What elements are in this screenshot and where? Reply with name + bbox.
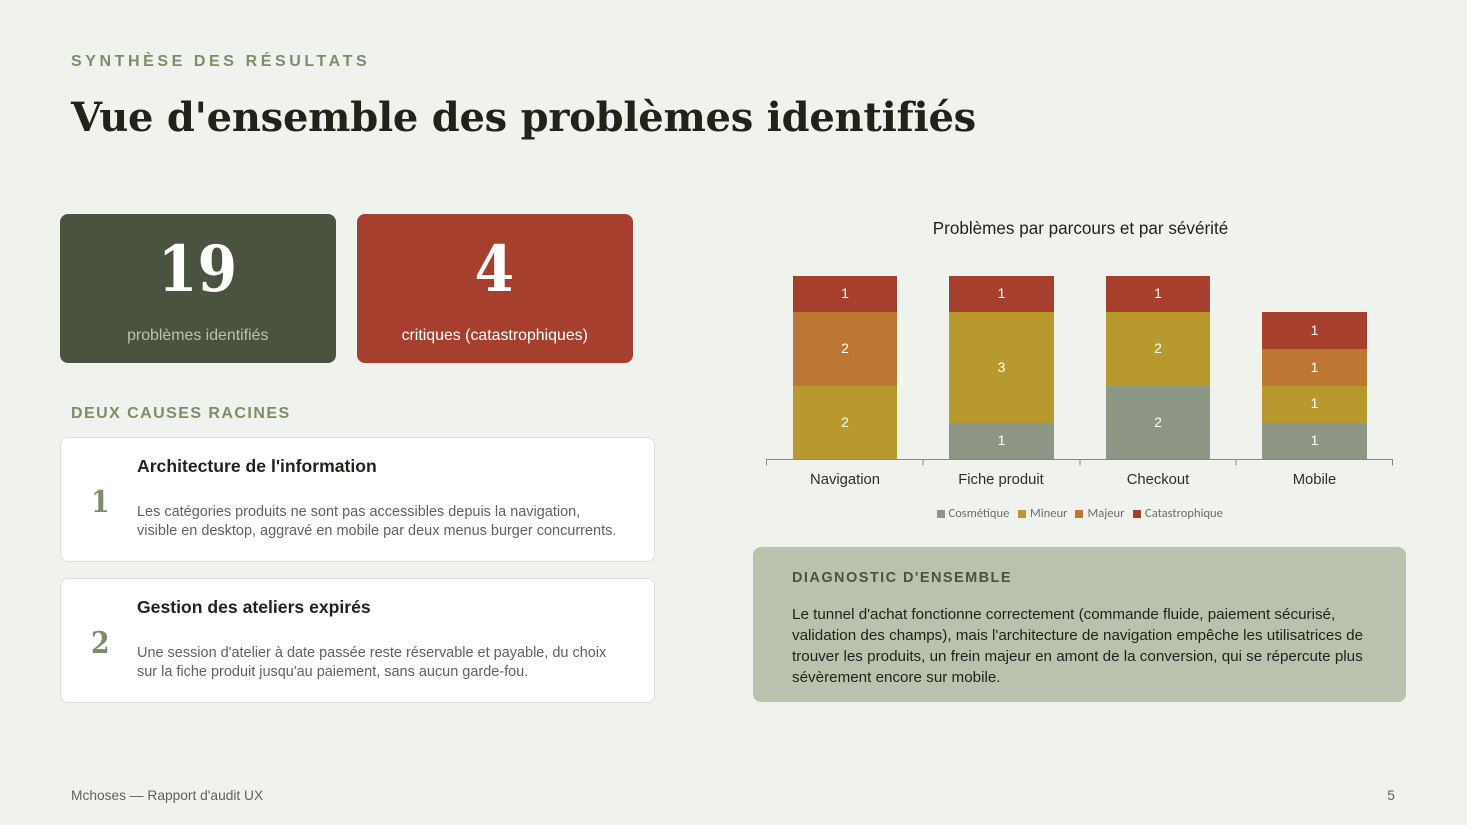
card: root cause 1 <box>60 437 655 562</box>
category labels <box>810 472 1336 488</box>
diagnosis text: trouver les produits, un frein majeur en amont de la conversion, qui se répercute plus <box>792 648 1363 665</box>
KPI: critical problems: critiques (catastrophiques) <box>402 327 588 344</box>
bars: Mobile: 1 <box>1311 432 1319 448</box>
bars: Checkout: 2 <box>1154 340 1162 356</box>
title: Vue d'ensemble des problèmes identifiés <box>71 94 976 141</box>
stacked bar chart <box>766 219 1393 521</box>
chart title: Problèmes par parcours et par sévérité <box>933 219 1228 238</box>
legend: Catastrophique <box>1145 506 1223 521</box>
legend: Mineur <box>1030 506 1068 521</box>
category labels: Checkout <box>1127 472 1189 488</box>
legend: Cosmétique <box>948 506 1009 521</box>
bars: Fiche produit: 1 <box>998 432 1006 448</box>
panel: overall diagnosis <box>753 547 1406 702</box>
card: root cause 1: Architecture de l'information <box>137 456 377 476</box>
bars: Mobile: 1 <box>1311 322 1319 338</box>
KPI: total problems <box>60 214 336 363</box>
bars: Fiche produit: 1 <box>998 285 1006 301</box>
diagnosis heading: DIAGNOSTIC D'ENSEMBLE <box>792 570 1012 586</box>
bars: Fiche produit <box>949 276 1054 460</box>
bars: Mobile: 1 <box>1311 359 1319 375</box>
card: root cause 2: sur la fiche produit jusqu'au paiement, sans aucun garde-fou. <box>137 664 528 680</box>
KPI: critical problems <box>357 214 632 363</box>
page number: 5 <box>1387 788 1395 803</box>
bars: Navigation: 2 <box>841 340 849 356</box>
KPI: total problems: 19 <box>158 232 237 306</box>
bars: Navigation <box>793 276 897 460</box>
bars: Fiche produit: 3 <box>998 359 1006 375</box>
legend <box>937 506 1223 521</box>
KPI: total problems: problèmes identifiés <box>127 327 268 344</box>
diagnosis text: sévèrement encore sur mobile. <box>792 669 1001 686</box>
card: root cause 2 <box>60 578 655 703</box>
diagnosis text: validation des champs), mais l'architecture de navigation empêche les utilisatrices de <box>792 627 1363 644</box>
bars: Checkout: 2 <box>1154 414 1162 430</box>
bars: Mobile: 1 <box>1311 395 1319 411</box>
legend: Majeur <box>1088 506 1125 521</box>
eyebrow heading: SYNTHÈSE DES RÉSULTATS <box>71 53 370 70</box>
bars: Navigation: 1 <box>841 285 849 301</box>
bars: Mobile <box>1262 312 1367 460</box>
category labels: Navigation <box>810 472 880 488</box>
diagnosis text: Le tunnel d'achat fonctionne correctement (commande fluide, paiement sécurisé, <box>792 606 1335 623</box>
category labels: Mobile <box>1293 472 1336 488</box>
KPI: critical problems: 4 <box>475 232 515 306</box>
bars: Checkout <box>1106 276 1210 460</box>
category labels: Fiche produit <box>958 472 1044 488</box>
card: root cause 2: Une session d'atelier à date passée reste réservable et payable, du choix <box>137 645 606 661</box>
card: root cause 1: 1 <box>91 485 110 520</box>
card: root cause 2: Gestion des ateliers expirés <box>137 597 371 617</box>
section heading: root causes: DEUX CAUSES RACINES <box>71 405 291 422</box>
footer source: Mchoses — Rapport d'audit UX <box>71 788 263 803</box>
bars: Checkout: 1 <box>1154 285 1162 301</box>
bars: Navigation: 2 <box>841 414 849 430</box>
diagnosis text <box>792 606 1363 686</box>
card: root cause 2: 2 <box>91 626 110 661</box>
card: root cause 1: visible en desktop, aggravé en mobile par deux menus burger concurrents. <box>137 523 616 539</box>
card: root cause 1: Les catégories produits ne sont pas accessibles depuis la navigation, <box>137 504 580 520</box>
